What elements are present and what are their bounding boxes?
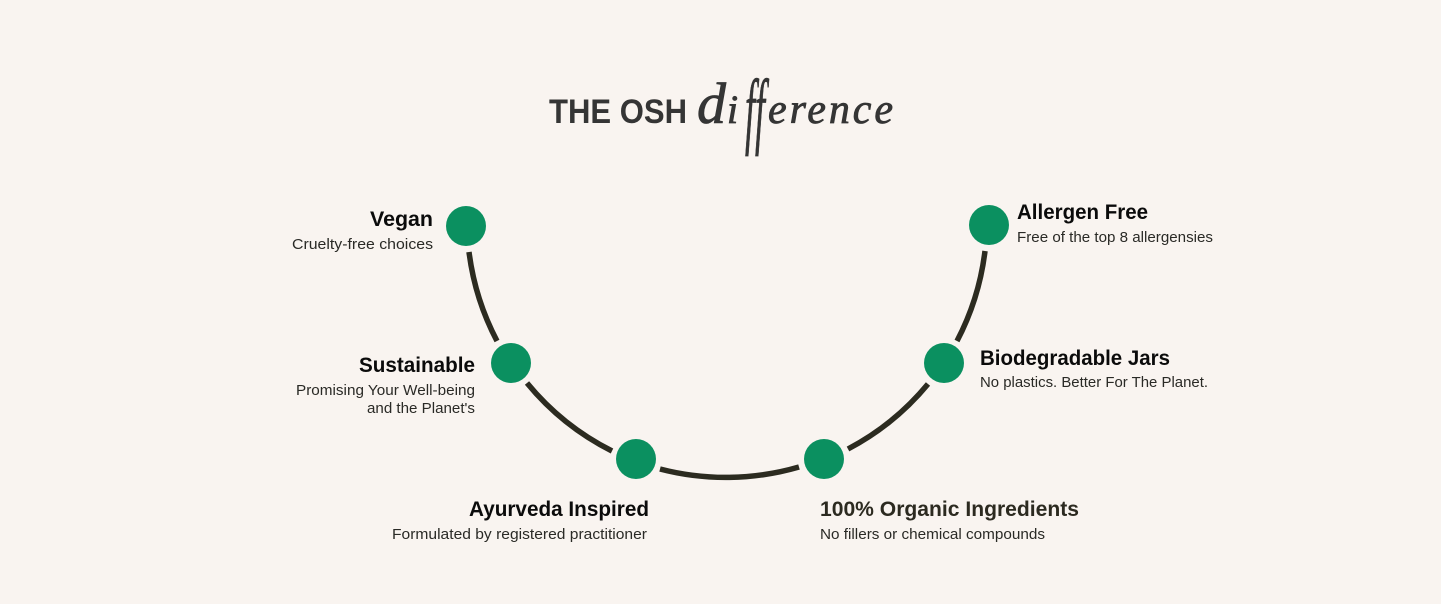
marker: [446, 206, 486, 246]
title: [549, 63, 893, 157]
description: Promising Your Well-being: [296, 383, 475, 399]
heading: Vegan: [370, 208, 433, 231]
description: No plastics. Better For The Planet.: [980, 375, 1208, 391]
description: Formulated by registered practitioner: [392, 527, 647, 543]
marker: [804, 439, 844, 479]
arc: Sustainable to Ayurveda Inspired: [527, 383, 612, 451]
item: Biodegradable Jars: [924, 343, 1208, 391]
title: difference script: i: [727, 87, 738, 132]
marker: [616, 439, 656, 479]
description: No fillers or chemical compounds: [820, 527, 1045, 543]
heading: Biodegradable Jars: [980, 347, 1170, 370]
title: difference script: d: [697, 71, 727, 136]
item: Sustainable: [296, 343, 531, 417]
item: Allergen Free: [969, 201, 1213, 246]
item: Ayurveda Inspired: [392, 439, 656, 543]
arc: Biodegradable to Allergen Free: [957, 251, 985, 341]
arc: Vegan to Sustainable: [469, 252, 497, 341]
curved connector: [469, 251, 985, 477]
marker: [924, 343, 964, 383]
title: THE OSH: THE OSH: [549, 93, 687, 131]
heading: Allergen Free: [1017, 201, 1148, 224]
arc: 100% Organic to Biodegradable: [848, 384, 928, 449]
marker: [491, 343, 531, 383]
item: 100% Organic Ingredients: [804, 439, 1079, 543]
description: Free of the top 8 allergensies: [1017, 230, 1213, 246]
title: difference script: erence: [768, 87, 893, 133]
arc: Ayurveda Inspired to 100% Organic: [660, 467, 799, 477]
description: Cruelty-free choices: [292, 237, 433, 253]
heading: Ayurveda Inspired: [469, 498, 649, 521]
heading: Sustainable: [359, 354, 475, 377]
description line 2: and the Planet's: [367, 401, 475, 417]
marker: [969, 205, 1009, 245]
title: difference script: ff: [745, 63, 769, 157]
heading: 100% Organic Ingredients: [820, 498, 1079, 521]
item: Vegan: [292, 206, 486, 253]
